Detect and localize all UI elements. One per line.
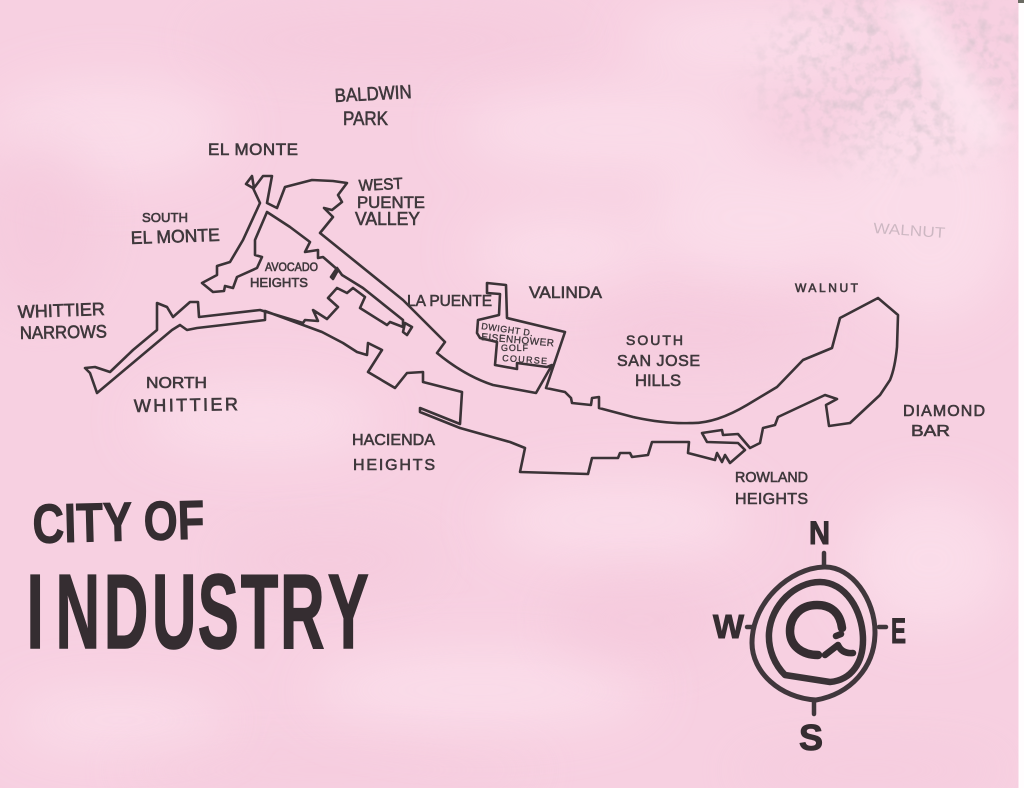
compass letters: E (891, 612, 906, 651)
labels: surrounding communities: HEIGHTS (250, 275, 308, 290)
label: golf course: COURSE (502, 353, 547, 366)
labels: surrounding communities: NARROWS (20, 321, 107, 343)
label: golf course: DWIGHT D. (481, 321, 534, 338)
labels: surrounding communities: HILLS (635, 371, 681, 390)
labels: surrounding communities: EL MONTE (208, 140, 298, 159)
labels: surrounding communities: PUENTE (357, 193, 425, 212)
labels: surrounding communities: ROWLAND (735, 469, 808, 486)
label: golf course (481, 321, 554, 366)
labels: surrounding communities: WEST (358, 176, 403, 195)
labels: surrounding communities: WHITTIER (134, 394, 238, 416)
icon: outer ring (752, 567, 875, 700)
labels: surrounding communities: HEIGHTS (353, 457, 435, 474)
title: INDUSTRY: INDUSTRY (27, 554, 369, 671)
labels: surrounding communities: EL MONTE (130, 225, 220, 248)
compass rose (713, 515, 906, 758)
labels: surrounding communities: SAN JOSE (617, 353, 700, 370)
title: CITY OF: CITY OF (32, 489, 205, 555)
labels: surrounding communities: PARK (343, 109, 388, 130)
outer boundary outline (85, 176, 898, 474)
ghost text show-through: WALNUT (873, 220, 946, 242)
map: City of Industry boundary (85, 176, 898, 474)
compass letters: W (713, 608, 745, 645)
labels: surrounding communities: NORTH (146, 375, 207, 392)
labels: surrounding communities: VALLEY (355, 209, 420, 229)
labels: surrounding communities: LA PUENTE (407, 293, 492, 310)
label: golf course: GOLF (501, 343, 528, 353)
labels: surrounding communities: WALNUT (795, 281, 859, 295)
compass letters: S (799, 717, 823, 758)
compass letters (713, 515, 906, 758)
icon: inner ring (769, 582, 863, 682)
labels: surrounding communities: AVOCADO (265, 260, 318, 274)
labels: surrounding communities: BALDWIN (334, 82, 412, 107)
compass letters: N (809, 515, 830, 551)
labels: surrounding communities: HEIGHTS (735, 491, 808, 508)
labels: surrounding communities: HACIENDA (352, 432, 435, 449)
labels: surrounding communities: BAR (911, 423, 950, 440)
labels: surrounding communities (17, 82, 985, 508)
labels: surrounding communities: VALINDA (529, 283, 603, 302)
label: golf course: EISENHOWER (481, 332, 554, 349)
icon: compass ticks (747, 553, 886, 714)
labels: surrounding communities: DIAMOND (903, 403, 985, 420)
small parcel (403, 323, 412, 335)
labels: surrounding communities: SOUTH (626, 332, 683, 348)
labels: surrounding communities: SOUTH (142, 210, 188, 225)
icon: central Q (790, 605, 853, 655)
labels: surrounding communities: WHITTIER (17, 299, 105, 322)
